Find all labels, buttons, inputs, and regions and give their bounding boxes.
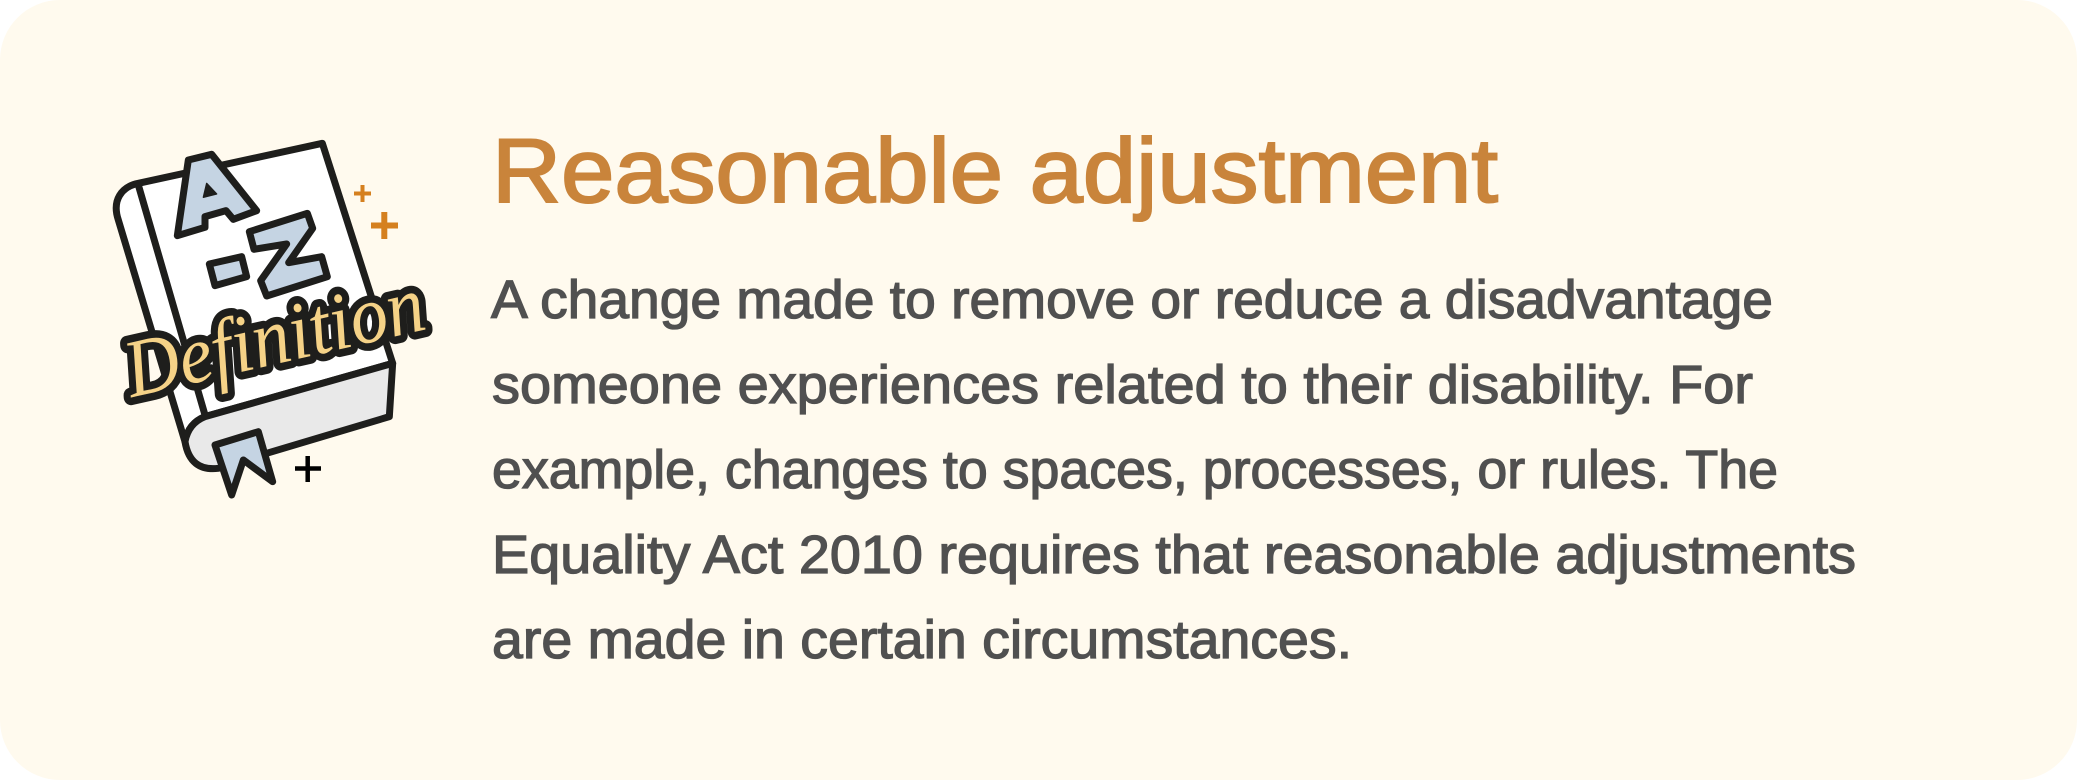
letter A counter bbox=[203, 183, 217, 197]
bookmark bbox=[215, 432, 273, 495]
icon: definition book bbox=[114, 143, 433, 495]
body text bbox=[491, 270, 1856, 670]
body text: A change made to remove or reduce a disadvantage bbox=[491, 270, 1773, 330]
dash bbox=[209, 257, 247, 286]
body text: are made in certain circumstances. bbox=[492, 610, 1352, 670]
icon: large orange plus bbox=[371, 212, 398, 239]
body text: Equality Act 2010 requires that reasonable adjustments bbox=[492, 525, 1856, 585]
script label: Definition: Definition bbox=[114, 258, 433, 415]
title: Reasonable adjustment bbox=[492, 121, 1498, 222]
book spine line bbox=[138, 185, 205, 415]
letter A bbox=[177, 154, 257, 236]
body text: someone experiences related to their disability. For bbox=[492, 355, 1753, 415]
book cover bbox=[116, 143, 393, 442]
icon: small orange plus bbox=[354, 185, 371, 202]
body text: example, changes to spaces, processes, or rules. The bbox=[492, 440, 1778, 500]
icon: black plus bbox=[295, 456, 321, 482]
book pages bbox=[185, 363, 393, 469]
letter Z bbox=[249, 213, 327, 296]
